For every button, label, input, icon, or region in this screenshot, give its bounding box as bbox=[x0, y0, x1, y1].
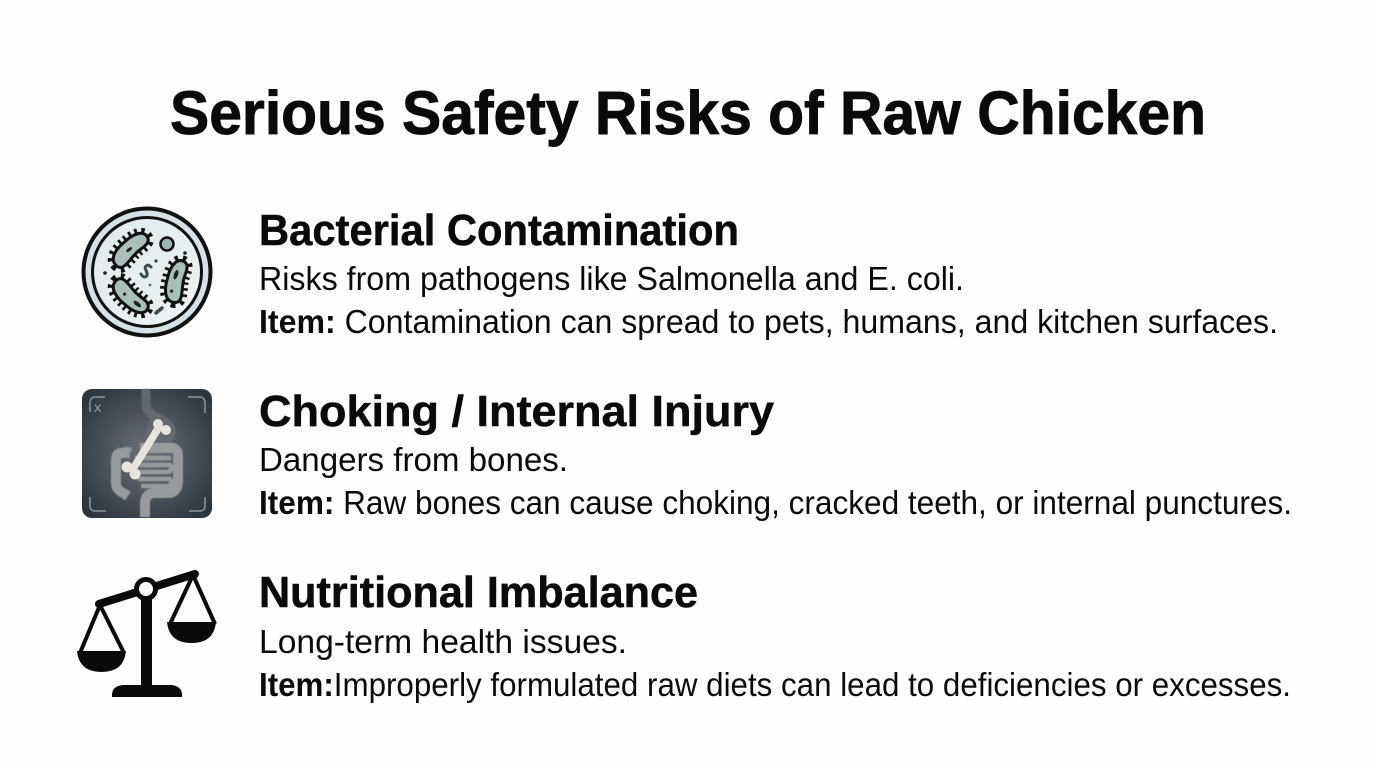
text: bacterial item: Item: Contamination can spread to pets, humans, and kitchen surfaces. bbox=[259, 303, 1278, 340]
text: nutrition description: Long-term health issues. bbox=[259, 623, 627, 660]
title: Serious Safety Risks of Raw Chicken bbox=[170, 79, 1206, 147]
icon: x-ray with bone bbox=[82, 389, 212, 518]
heading: choking: Choking / Internal Injury bbox=[259, 387, 775, 436]
icon: balance scale bbox=[77, 574, 216, 697]
colony spots and squiggle bbox=[103, 238, 187, 313]
text: nutrition item: Item:Improperly formulated raw diets can lead to deficiencies or excesses. bbox=[259, 666, 1291, 703]
icon: petri dish with bacteria bbox=[84, 208, 210, 336]
bacterium: bottom left bbox=[108, 276, 153, 317]
bacterium: top left bbox=[108, 229, 153, 270]
text: choking item: Item: Raw bones can cause choking, cracked teeth, or internal punctures. bbox=[259, 484, 1292, 521]
text: choking description: Dangers from bones. bbox=[259, 441, 568, 478]
bacterium: right bbox=[161, 258, 192, 304]
digestive tract bbox=[116, 389, 178, 517]
text: bacterial description: Risks from pathogens like Salmonella and E. coli. bbox=[259, 260, 964, 297]
x-ray marker letter: X bbox=[94, 403, 102, 415]
heading: bacterial contamination: Bacterial Contamination bbox=[259, 206, 739, 255]
x-ray corner marks bbox=[90, 397, 205, 511]
bone bbox=[122, 419, 171, 480]
heading: nutritional imbalance: Nutritional Imbalance bbox=[259, 568, 698, 617]
